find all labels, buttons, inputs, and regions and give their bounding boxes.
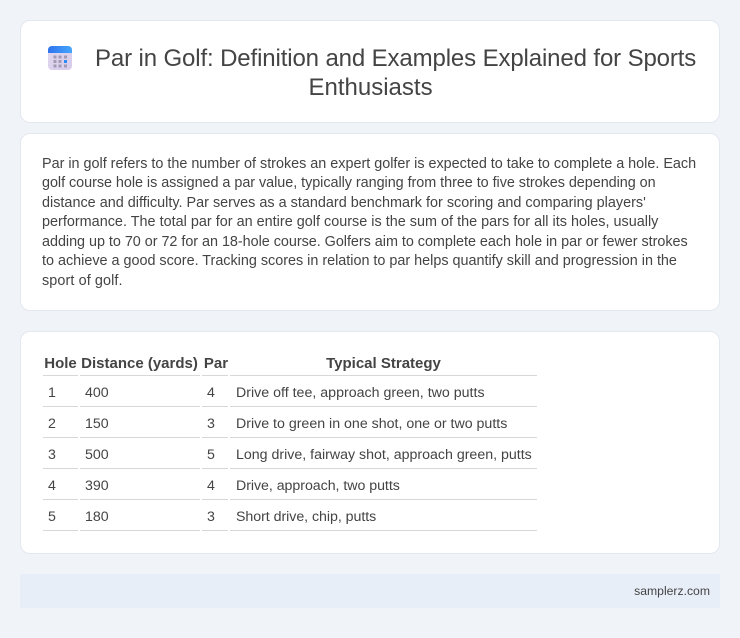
footer text: samplerz.com xyxy=(634,584,710,598)
row 2: Drive to green in one shot, one or two putts xyxy=(236,416,507,432)
text block: description: adding up to 70 or 72 for an 18-hole course. Golfers aim to complete each hole in par or fewer strokes xyxy=(42,234,688,250)
row 4: Drive, approach, two putts xyxy=(236,478,400,494)
row 1 xyxy=(48,385,485,401)
heading: title: Enthusiasts xyxy=(308,74,433,101)
row 1: Drive off tee, approach green, two putts xyxy=(236,385,485,401)
icon: calendar xyxy=(48,46,72,70)
text block: description: to achieve a good score. Tracking scores in relation to par helps quantify skill and progression in the xyxy=(42,253,677,269)
panel: description card xyxy=(20,133,720,311)
row 5 xyxy=(48,509,376,525)
row 3 xyxy=(48,447,532,463)
text block: description: Par in golf refers to the number of strokes an expert golfer is expected to take to complete a hole. Each xyxy=(42,156,696,172)
text block: description: golf course hole is assigned a par value, typically ranging from three to five strokes depending on xyxy=(42,175,656,191)
table: golf holes xyxy=(43,355,537,531)
row 1: 400 xyxy=(85,385,109,401)
text block: description: distance and difficulty. Par serves as a standard benchmark for scoring and comparing players' xyxy=(42,195,646,211)
heading: title: Par in Golf: Definition and Examples Explained for Sports xyxy=(95,45,696,72)
row 5: Short drive, chip, putts xyxy=(236,509,376,525)
row 3: Long drive, fairway shot, approach green, putts xyxy=(236,447,532,463)
row 5: 3 xyxy=(207,509,215,525)
table header: Hole xyxy=(44,355,77,372)
table header: Par xyxy=(204,355,228,372)
row 2 xyxy=(48,416,507,432)
row 2: 150 xyxy=(85,416,109,432)
row 5: 180 xyxy=(85,509,109,525)
row 4: 4 xyxy=(207,478,215,494)
row 3: 3 xyxy=(48,447,56,463)
text block: description: sport of golf. xyxy=(42,273,123,289)
text block: description xyxy=(42,156,696,289)
panel: table card xyxy=(20,331,720,554)
row 4 xyxy=(48,478,400,494)
table header: Distance (yards) xyxy=(81,355,198,372)
table header: Typical Strategy xyxy=(326,355,441,372)
row 5: 5 xyxy=(48,509,56,525)
heading: title xyxy=(95,45,696,101)
row 4: 4 xyxy=(48,478,56,494)
footer bar xyxy=(20,574,720,608)
row 4: 390 xyxy=(85,478,109,494)
text block: description: performance. The total par for an entire golf course is the sum of the pars for all its holes, usually xyxy=(42,214,658,230)
table header xyxy=(44,355,441,372)
row 3: 5 xyxy=(207,447,215,463)
row 2: 2 xyxy=(48,416,56,432)
row 1: 1 xyxy=(48,385,56,401)
row 1: 4 xyxy=(207,385,215,401)
row 3: 500 xyxy=(85,447,109,463)
panel: title card xyxy=(20,20,720,123)
row 2: 3 xyxy=(207,416,215,432)
